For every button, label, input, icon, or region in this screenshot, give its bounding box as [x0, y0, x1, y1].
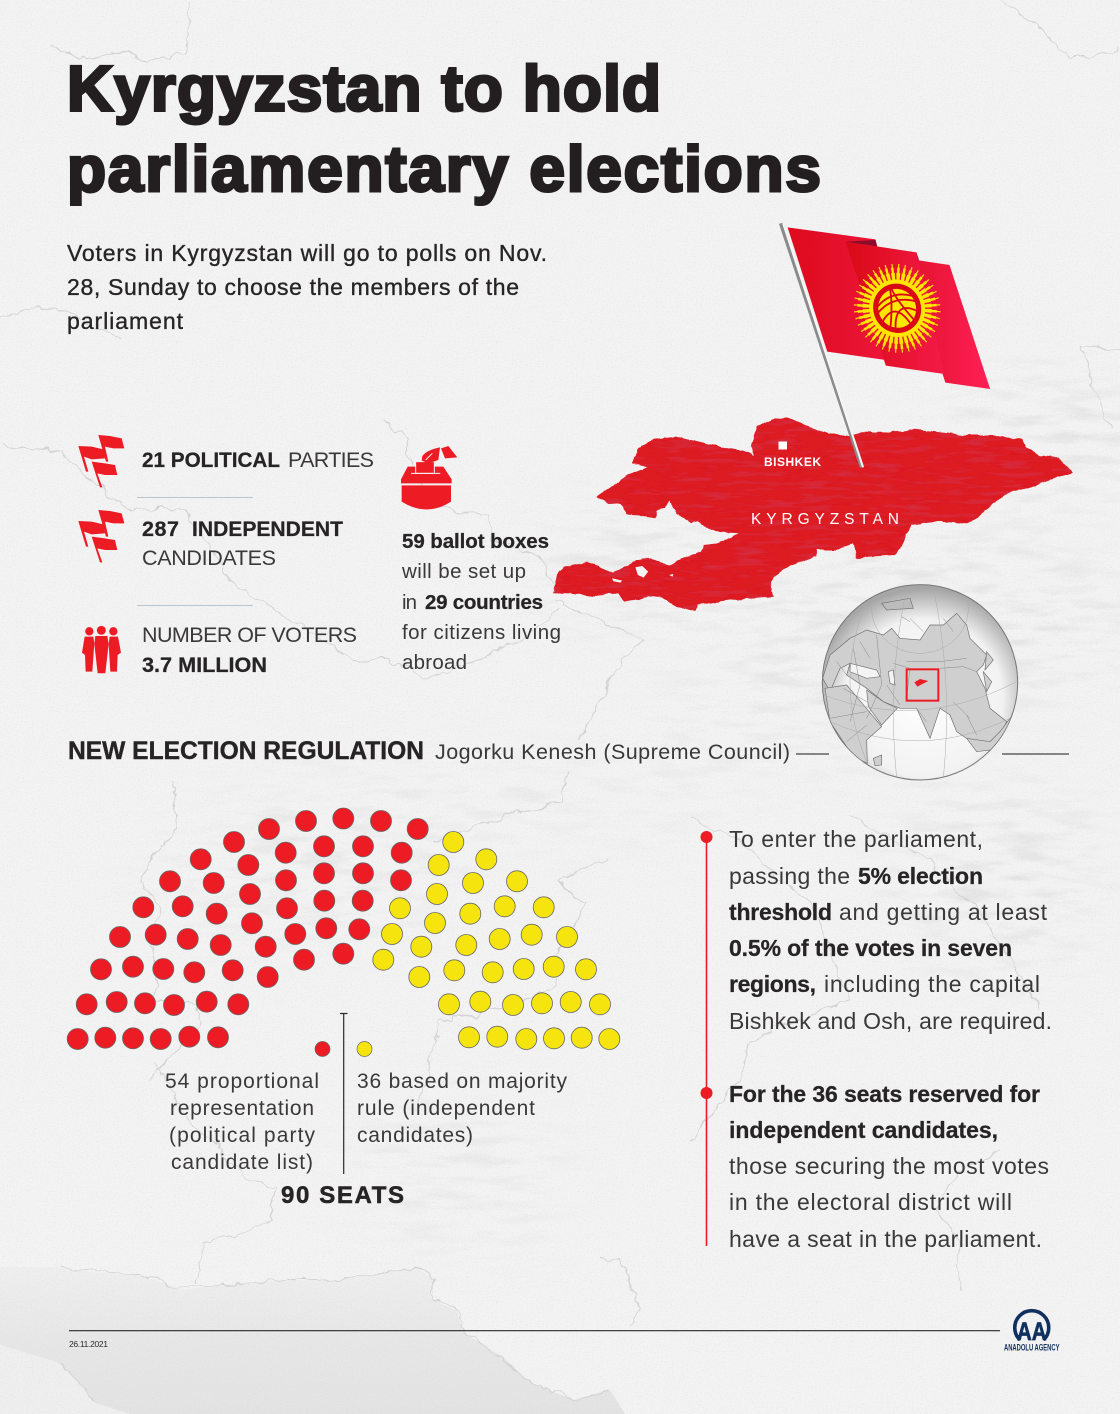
icon: flags — [78, 510, 124, 562]
total seats: 90 SEATS — [281, 1182, 404, 1209]
ballot box block — [401, 446, 561, 674]
title: Kyrgyzstan to hold — [67, 52, 661, 124]
section heading: Jogorku Kenesh (Supreme Council) — [435, 740, 790, 764]
text: threshold: including the capital — [824, 971, 1040, 997]
label: Kyrgyzstan: KYRGYZSTAN — [751, 511, 899, 528]
ballot box block: 59 ballot boxes — [402, 530, 549, 553]
flag with pole — [781, 223, 990, 467]
legend: proportional — [165, 1042, 330, 1174]
stat: number of voters: 3.7 MILLION — [142, 653, 267, 677]
section heading — [68, 737, 1069, 765]
stat: number of voters: NUMBER OF VOTERS — [142, 623, 357, 647]
section heading: NEW ELECTION REGULATION — [68, 737, 424, 765]
ballot box block: in — [402, 591, 417, 614]
ballot box block: for citizens living — [402, 621, 561, 644]
stat: political parties — [78, 435, 374, 487]
text: threshold: regions, — [729, 971, 816, 997]
icon: ballot box — [401, 446, 457, 509]
stat: political parties: 21 POLITICAL — [142, 448, 280, 472]
text: independent seats: For the 36 seats reserved for — [729, 1081, 1040, 1107]
logo: Anadolu Agency: AA — [1017, 1318, 1046, 1346]
text: threshold: To enter the parliament, — [729, 826, 983, 852]
text: threshold — [729, 826, 1052, 1034]
label: Bishkek — [764, 442, 821, 469]
legend: majority: 36 based on majority — [357, 1070, 568, 1093]
enclaves — [612, 566, 673, 583]
text: independent seats: have a seat in the parliament. — [729, 1226, 1042, 1252]
text: independent seats: in the electoral district will — [729, 1189, 1012, 1215]
yellow seats — [373, 832, 620, 1050]
globe — [822, 584, 1018, 780]
stat: number of voters — [82, 623, 357, 677]
text: threshold: 0.5% of the votes in seven — [729, 935, 1012, 961]
label: Bishkek: BISHKEK — [764, 455, 821, 469]
title: parliamentary elections — [67, 133, 821, 205]
legend: proportional: (political party — [169, 1124, 316, 1147]
intro text: Voters in Kyrgyzstan will go to polls on Nov. — [67, 240, 547, 266]
text: threshold: Bishkek and Osh, are required. — [729, 1008, 1052, 1034]
seat chart: hemicycle — [67, 808, 620, 1050]
title — [67, 52, 821, 205]
timeline rule — [700, 831, 712, 1246]
stat: political parties: PARTIES — [288, 448, 374, 472]
map: Kyrgyzstan — [553, 417, 1073, 612]
text: threshold: passing the — [729, 863, 850, 889]
legend: proportional: representation — [170, 1097, 314, 1120]
stat: independent candidates: 287 — [142, 517, 179, 541]
footer: 26.11.2021 — [69, 1339, 108, 1349]
intro text: 28, Sunday to choose the members of the — [67, 274, 519, 300]
logo: Anadolu Agency: ANADOLU AGENCY — [1004, 1342, 1060, 1352]
ballot box block: 29 countries — [425, 591, 543, 614]
logo: Anadolu Agency — [1004, 1311, 1060, 1352]
stat: independent candidates: CANDIDATES — [142, 546, 276, 570]
text: independent seats — [729, 1081, 1049, 1252]
text: threshold: threshold — [729, 899, 832, 925]
legend: proportional: 54 proportional — [165, 1070, 319, 1093]
stat: independent candidates: INDEPENDENT — [192, 517, 343, 541]
text: threshold: and getting at least — [839, 899, 1048, 925]
icon: flags — [78, 435, 124, 487]
stat: independent candidates — [78, 510, 343, 570]
text: independent seats: those securing the most votes — [729, 1153, 1049, 1179]
ballot box block: abroad — [402, 651, 467, 674]
intro text: parliament — [67, 308, 184, 334]
text: threshold: 5% election — [858, 863, 983, 889]
ballot box block: will be set up — [401, 560, 526, 583]
legend: majority: candidates) — [357, 1124, 473, 1147]
legend: majority — [357, 1042, 568, 1147]
red seats — [67, 808, 428, 1050]
legend: proportional: candidate list) — [171, 1151, 313, 1174]
text: independent seats: independent candidates, — [729, 1117, 998, 1143]
icon: people — [82, 626, 121, 673]
intro text — [67, 240, 547, 334]
seat legend — [165, 1013, 568, 1209]
legend: majority: rule (independent — [357, 1097, 535, 1120]
